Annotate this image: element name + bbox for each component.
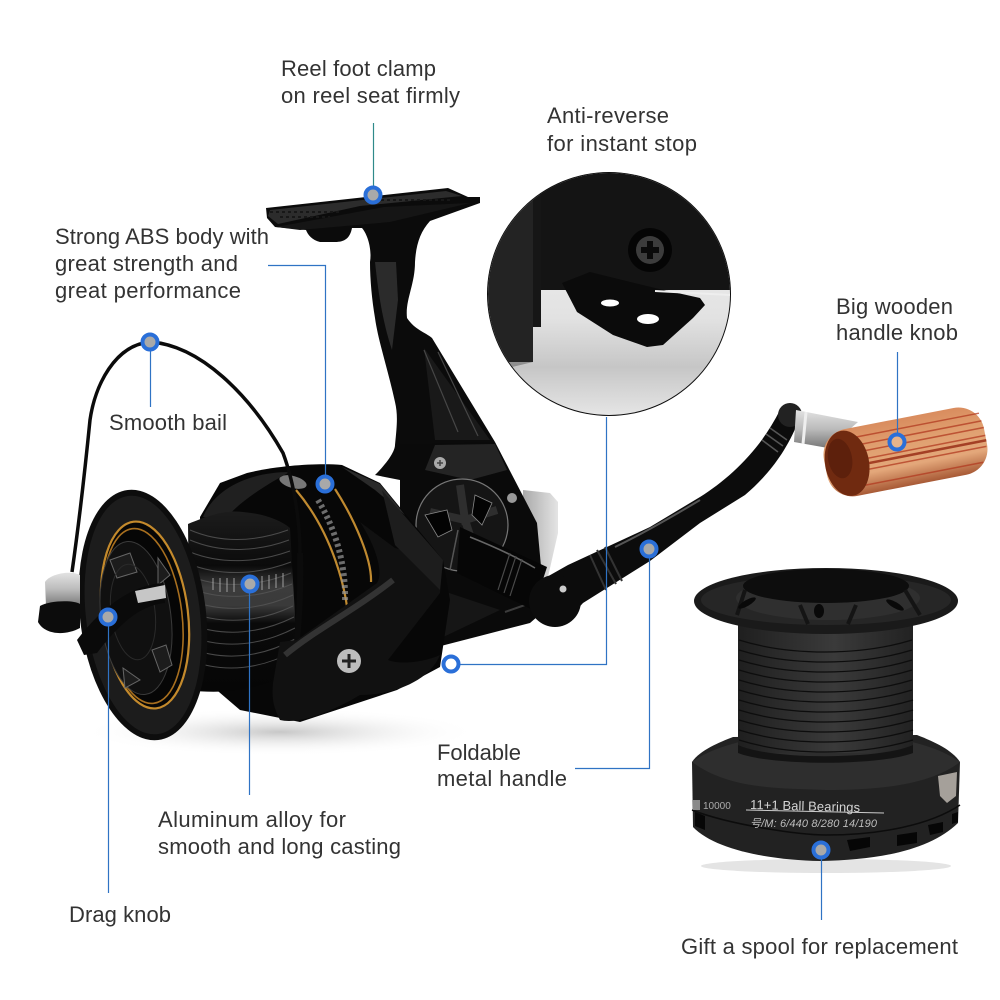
magnified detail: anti-reverse bbox=[487, 172, 731, 416]
spare spool base bbox=[692, 733, 960, 861]
callout: spare spool bbox=[681, 842, 958, 959]
callout: spare spool: Gift a spool for replacement bbox=[681, 934, 958, 959]
floor shadow bbox=[80, 708, 480, 756]
callout: aluminum alloy bbox=[158, 576, 401, 859]
spare spool base: 号/M: 6/440 8/280 14/190 bbox=[750, 818, 878, 830]
spare spool top flange bbox=[694, 568, 958, 634]
spare spool print: 11+1 Ball Bearings bbox=[750, 797, 861, 815]
reel foot and stem bbox=[266, 188, 495, 480]
spare spool bbox=[692, 568, 960, 873]
reel gearbox body bbox=[400, 442, 558, 647]
callout: foldable handle: metal handle bbox=[437, 766, 567, 791]
callout: anti-reverse bbox=[444, 103, 697, 672]
callout: aluminum alloy: smooth and long casting bbox=[158, 834, 401, 859]
callout: ABS body: great performance bbox=[55, 278, 241, 303]
callout: drag knob bbox=[69, 610, 171, 927]
callout: foldable handle: Foldable bbox=[437, 740, 521, 765]
line spool with ridges bbox=[188, 512, 298, 692]
spare spool shadow bbox=[701, 859, 951, 873]
spare spool base: 10000 bbox=[703, 801, 731, 812]
front rotor arm bbox=[273, 490, 443, 721]
bail wire bbox=[72, 342, 300, 640]
callout: reel foot clamp bbox=[281, 56, 460, 202]
callout: reel foot clamp: Reel foot clamp bbox=[281, 56, 436, 81]
callout: anti-reverse: Anti-reverse bbox=[547, 103, 669, 128]
callout: aluminum alloy: Aluminum alloy for bbox=[158, 807, 346, 832]
callout: ABS body: great strength and bbox=[55, 251, 238, 276]
drag knob bbox=[77, 583, 166, 655]
bail arm knob bbox=[38, 573, 80, 633]
callout: smooth bail bbox=[109, 334, 227, 435]
main fishing reel bbox=[38, 188, 992, 756]
handle arm bbox=[450, 403, 858, 627]
callout: drag knob: Drag knob bbox=[69, 902, 171, 927]
front spool flange bbox=[65, 482, 221, 748]
callout: anti-reverse: for instant stop bbox=[547, 131, 697, 156]
callout: wooden knob: handle knob bbox=[836, 320, 958, 345]
callout: ABS body bbox=[55, 224, 332, 492]
callout: ABS body: Strong ABS body with bbox=[55, 224, 269, 249]
callout: wooden knob bbox=[836, 294, 958, 450]
callout: smooth bail: Smooth bail bbox=[109, 410, 227, 435]
callout: reel foot clamp: on reel seat firmly bbox=[281, 83, 460, 108]
callout: wooden knob: Big wooden bbox=[836, 294, 953, 319]
spare spool ridged barrel bbox=[738, 625, 913, 763]
rear rotor cup bbox=[200, 464, 450, 722]
callout: foldable handle bbox=[437, 542, 656, 791]
wooden handle knob bbox=[819, 403, 992, 501]
